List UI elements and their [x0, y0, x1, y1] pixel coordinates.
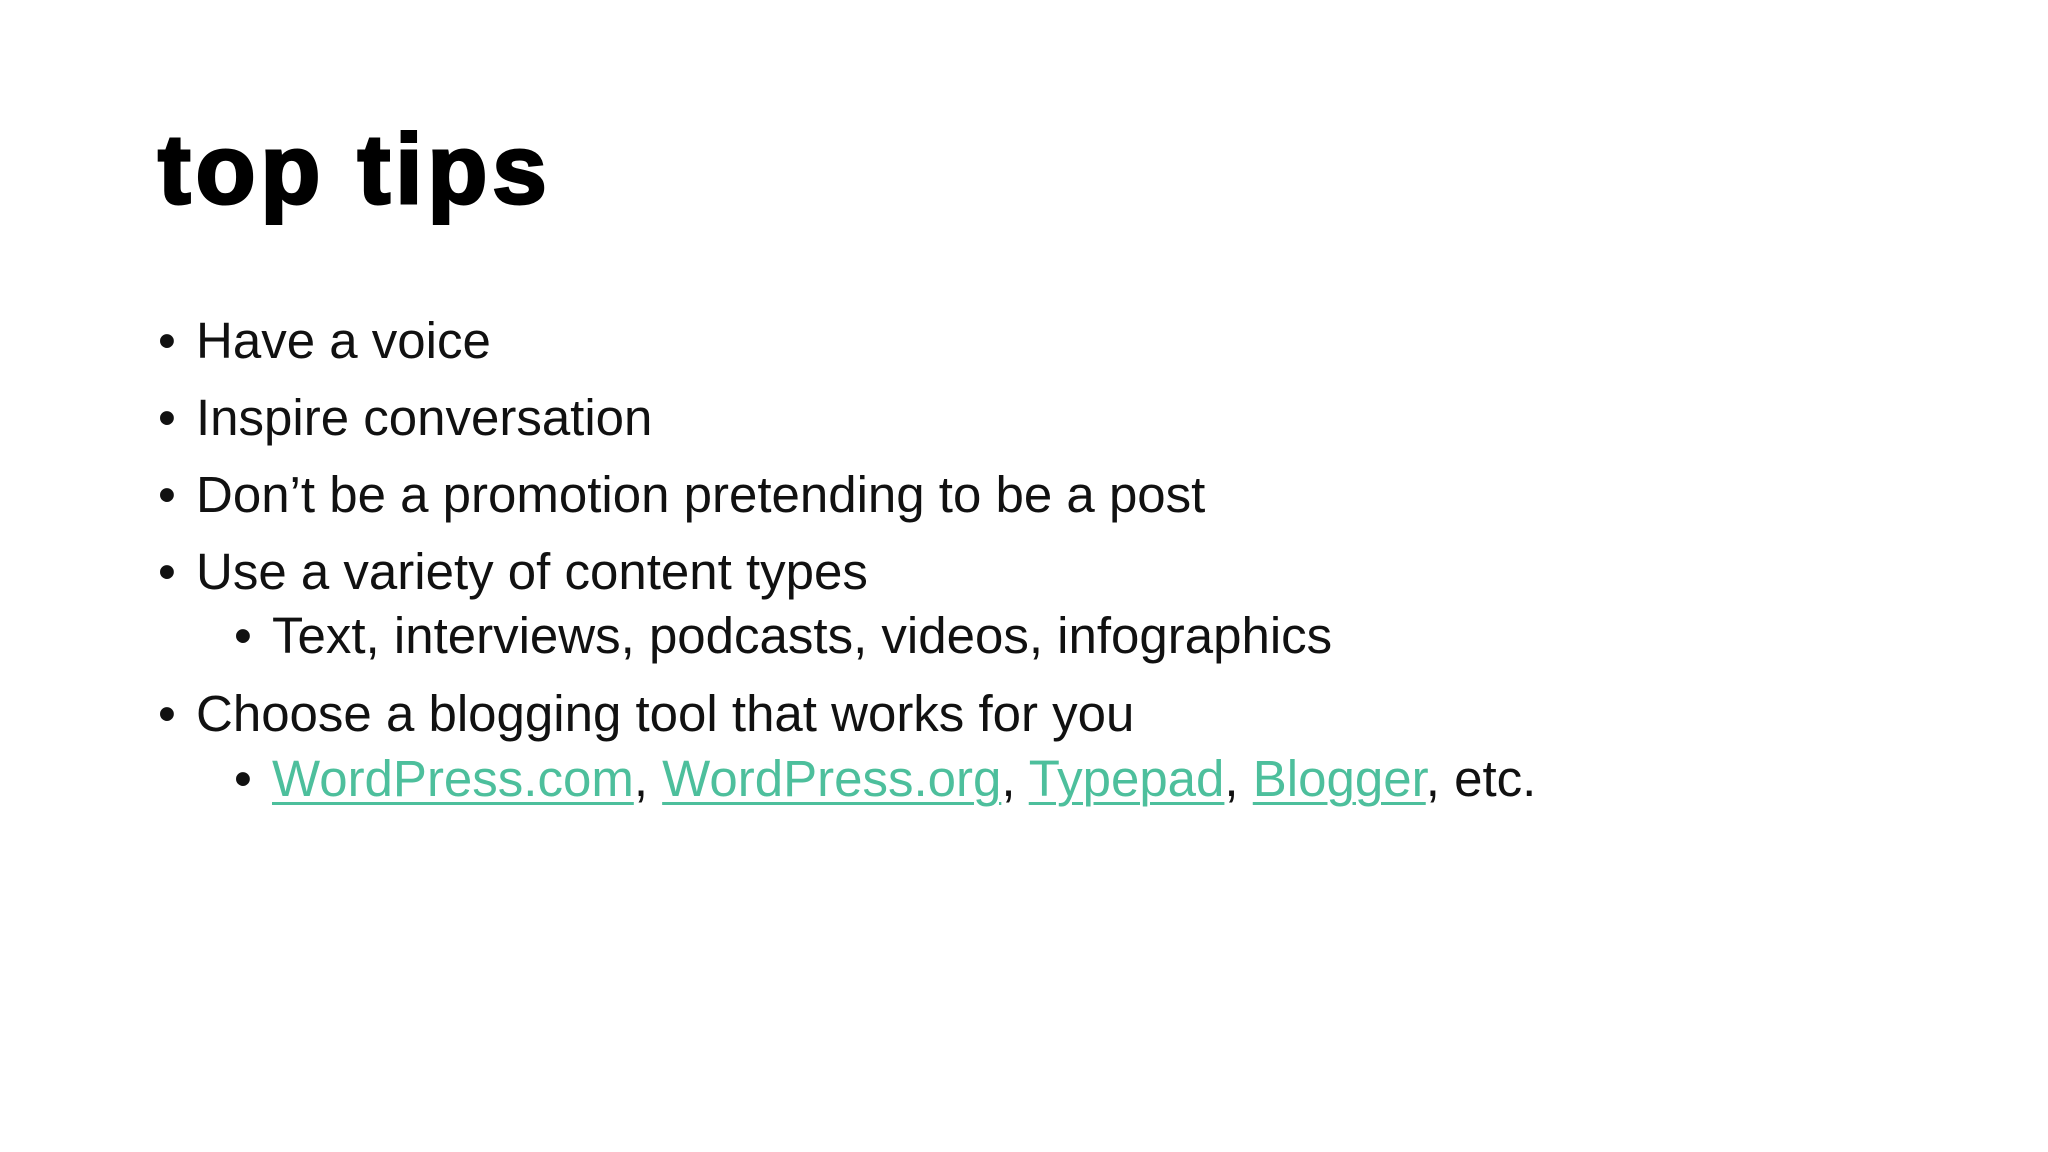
- bullet: content types: Use a variety of content types: [196, 543, 868, 600]
- sub-bullet: tool links: •: [234, 750, 252, 807]
- bullet: blogging tool: Choose a blogging tool that works for you: [196, 685, 1134, 742]
- sub-bullet: tool links: WordPress.com, WordPress.org, Typepad, Blogger, etc.: [272, 750, 1536, 807]
- bullet: have a voice: Have a voice: [196, 312, 491, 369]
- bullet: content types: •: [158, 543, 176, 600]
- bullet: blogging tool: •: [158, 685, 176, 742]
- bullet: have a voice: •: [158, 312, 176, 369]
- bullet: promotion: •: [158, 466, 176, 523]
- sub-bullet: content examples: •: [234, 607, 252, 664]
- bullet list: [158, 312, 1536, 807]
- title: top tips: [158, 114, 552, 224]
- bullet: inspire conversation: Inspire conversation: [196, 389, 652, 446]
- bullet: promotion: Don’t be a promotion pretending to be a post: [196, 466, 1205, 523]
- sub-bullet: content examples: Text, interviews, podcasts, videos, infographics: [272, 607, 1332, 664]
- bullet: inspire conversation: •: [158, 389, 176, 446]
